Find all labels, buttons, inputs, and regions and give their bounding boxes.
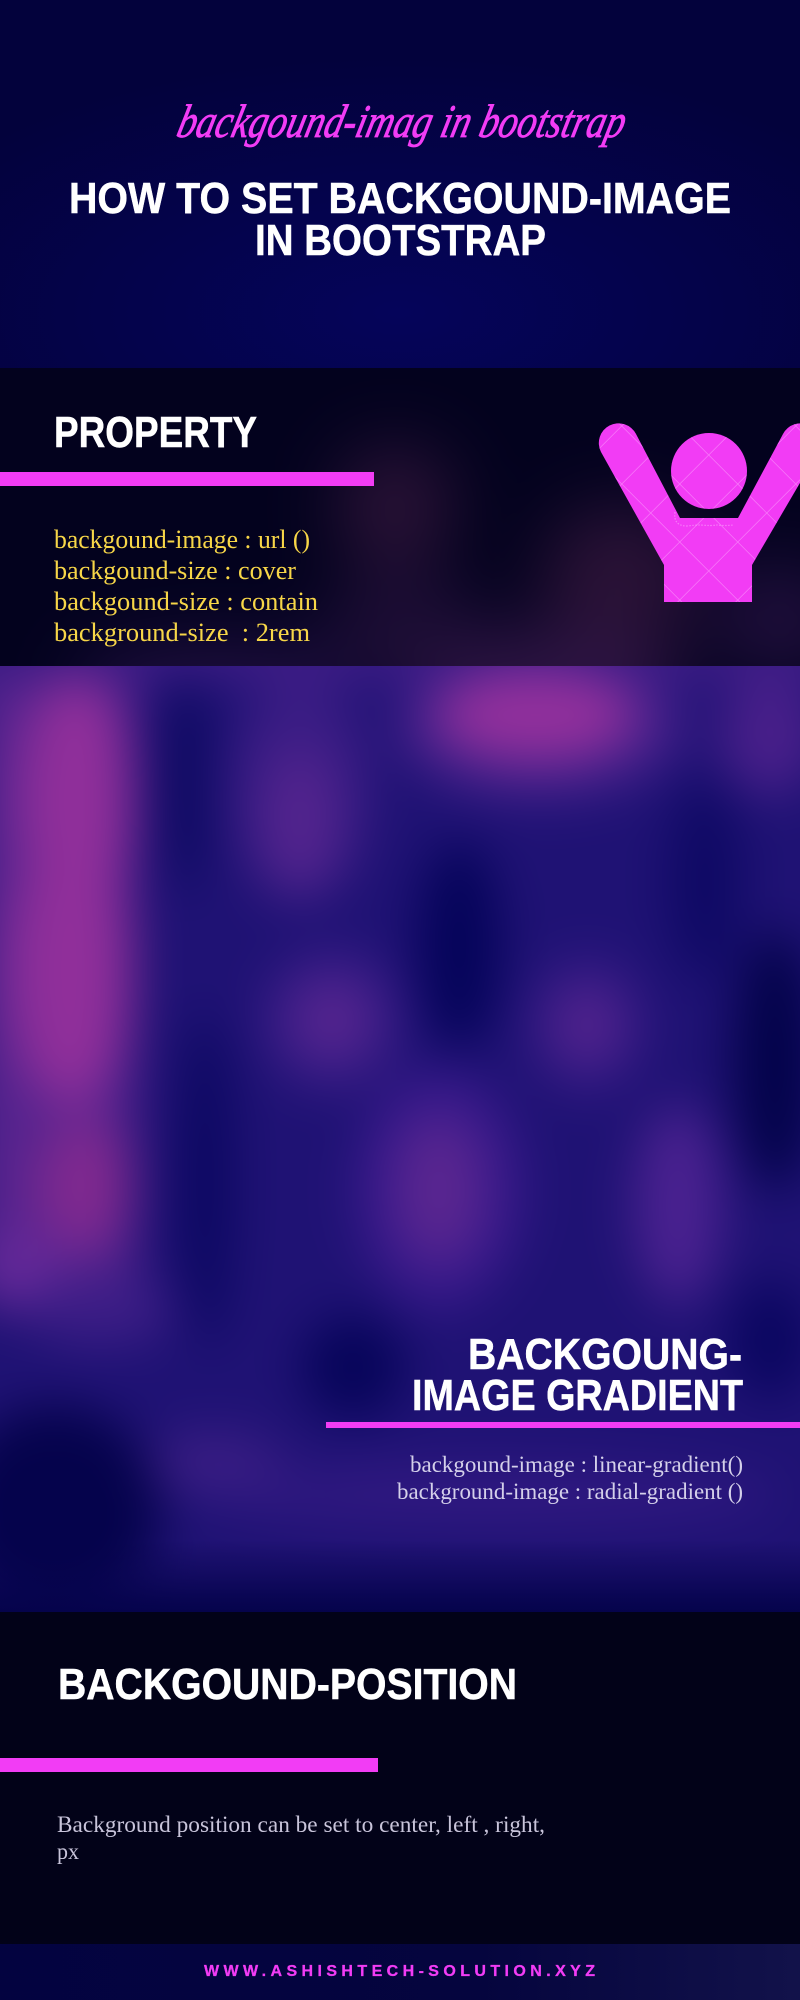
website url: WWW.ASHISHTECH-SOLUTION.XYZ (204, 1963, 595, 1980)
heading: IMAGE GRADIENT (412, 1371, 743, 1420)
left column halo (0, 680, 135, 1280)
small blobs (262, 950, 402, 1090)
description: Background position can be set to center, left , right, (57, 1812, 545, 1837)
accent bar (0, 472, 374, 486)
gradient property list: background-image : radial-gradient () (397, 1479, 743, 1504)
dark pockets (417, 840, 501, 1050)
accent bar (326, 1422, 800, 1428)
lower blobs (354, 1070, 524, 1310)
description (57, 1812, 545, 1864)
heading: BACKGOUND-POSITION (58, 1660, 517, 1709)
property list: background-size : 2rem (54, 618, 310, 647)
title (69, 174, 731, 265)
description: px (57, 1839, 79, 1864)
panel: header (0, 0, 800, 368)
property list: backgound-image : url () (54, 525, 310, 554)
property list: backgound-size : cover (54, 556, 296, 585)
mid column blob (230, 675, 370, 905)
heading: PROPERTY (54, 408, 257, 457)
gradient property list (397, 1452, 743, 1504)
heading: BACKGOUNG- (468, 1330, 742, 1379)
icon: person with raised arms (598, 423, 800, 602)
title: IN BOOTSTRAP (255, 216, 546, 265)
gradient property list: backgound-image : linear-gradient() (410, 1452, 743, 1477)
title: HOW TO SET BACKGOUND-IMAGE (69, 174, 731, 223)
footer (0, 1944, 800, 2000)
top right blob (395, 650, 685, 800)
background glow (78, 427, 800, 666)
panel: background-position (0, 1612, 800, 1944)
heading (412, 1330, 743, 1420)
panel: property (0, 416, 800, 666)
accent bar (0, 1758, 378, 1772)
bottom band (145, 1433, 285, 1493)
blurred colour blobs (0, 666, 800, 1612)
panel: background-image gradient (0, 666, 800, 1612)
subtitle: backgound-imag in bootstrap (172, 96, 632, 148)
property list (54, 525, 318, 647)
property list: backgound-size : contain (54, 587, 318, 616)
